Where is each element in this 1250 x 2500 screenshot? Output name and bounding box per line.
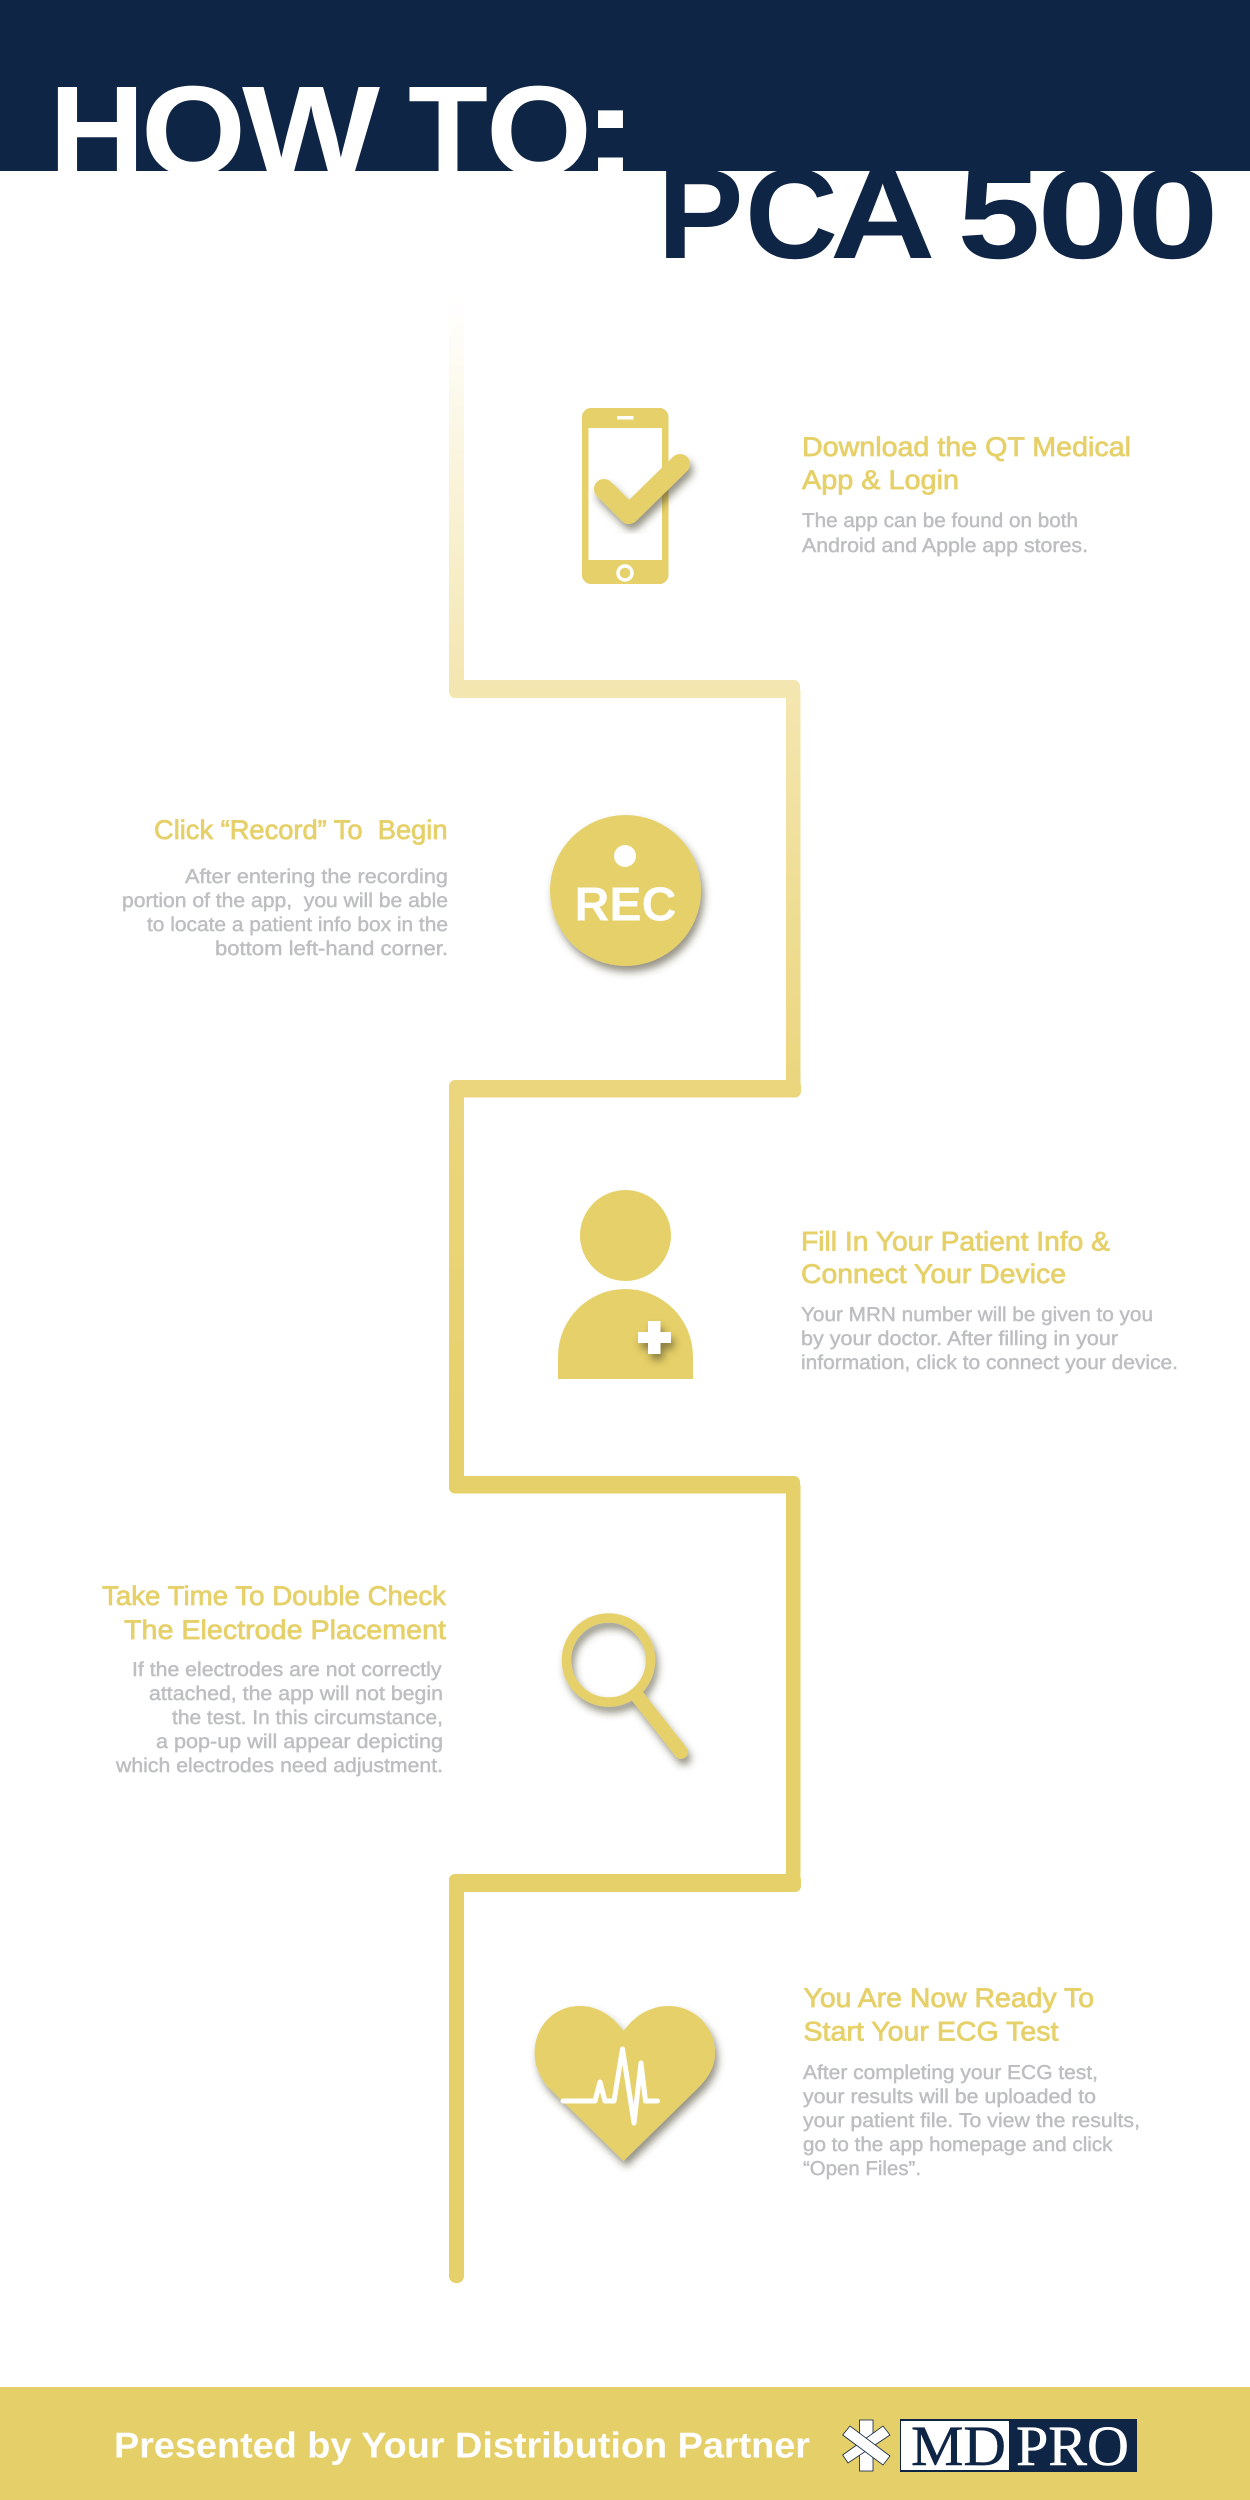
panel: step 4 electrode check [102,1581,681,1777]
heading: step 1 [802,432,1131,495]
title: PCA 500: 0 [1037,143,1129,286]
heading: step 3 [801,1226,1110,1289]
text: step 4 body: the test. In this circumstance, [172,1707,443,1729]
text: step 4 body: which electrodes need adjustment. [115,1755,443,1777]
heading: step 4: The Electrode Placement [124,1615,447,1645]
text: step 5 body: your patient file. To view the results, [803,2110,1140,2132]
title: HOW TO: O [486,60,592,203]
text: step 4 body: attached, the app will not begin [149,1683,443,1705]
text: step 2 body: After entering the recording [185,866,448,888]
logo wordmark [900,2415,1137,2478]
title: HOW TO: H [49,60,145,203]
title: HOW TO: O [141,60,246,203]
text: step 1 body: Android and Apple app stores. [802,535,1088,557]
panel: step 1 download [582,408,1131,584]
logo: MDPRO [843,2415,1137,2478]
text: step 4 body [115,1659,443,1777]
heading: step 1: App & Login [802,465,959,495]
title: PCA 500: 5 [958,143,1040,286]
heading: step 5: Start Your ECG Test [804,2016,1059,2046]
text: step 5 body [803,2062,1140,2180]
footer text: Presented by Your Distribution Partner [114,2424,810,2466]
heading: step 2: Click “Record” To Begin [154,815,448,845]
text: step 5 body: your results will be uploaded to [803,2086,1096,2108]
icon: patient with medical cross [558,1190,693,1379]
text: step 1 body: The app can be found on both [802,510,1078,532]
heading: step 4: Take Time To Double Check [102,1581,447,1611]
logo wordmark: MD [911,2415,1006,2478]
icon: phone with check mark [582,408,680,584]
title: PCA 500: C [745,143,838,286]
title: PCA 500: 0 [1127,143,1219,286]
heading: step 5 [804,1983,1094,2046]
text: step 5 body: “Open Files”. [803,2158,921,2180]
connector line: zig-zag timeline [449,300,801,2283]
panel: step 5 ECG test [535,1983,1140,2180]
heading: step 5: You Are Now Ready To [804,1983,1094,2013]
footer band [0,2387,1250,2500]
logo wordmark: PRO [1016,2415,1129,2478]
icon: logo star [843,2420,890,2471]
heading: step 4 [102,1581,447,1645]
header band [0,0,1250,171]
heading: step 1: Download the QT Medical [802,432,1131,462]
text: step 3 body: Your MRN number will be given to you [801,1304,1153,1326]
text: step 2 body: bottom left-hand corner. [215,938,448,960]
title: HOW TO: W [242,60,380,203]
text: step 5 body: After completing your ECG test, [803,2062,1098,2084]
text: step 4 body: If the electrodes are not correctly [132,1659,442,1681]
icon: heart with ECG trace [535,2006,715,2161]
panel: step 2 record [122,815,701,966]
title: HOW TO: T [408,60,488,203]
text: step 5 body: go to the app homepage and click [803,2134,1114,2156]
text: step 1 body [802,510,1088,557]
title: HOW TO: : [581,60,640,203]
icon: REC button [550,815,701,966]
heading: step 3: Connect Your Device [801,1259,1066,1289]
text: step 2 body [122,866,448,960]
text: step 3 body: information, click to connect your device. [801,1352,1178,1374]
text: step 2 body: to locate a patient info box in the [147,914,448,936]
panel: step 3 patient info [558,1190,1178,1379]
text: step 4 body: a pop-up will appear depicting [156,1731,443,1753]
title: PCA 500: A [830,143,933,286]
icon: REC button: REC [574,878,676,932]
heading: step 3: Fill In Your Patient Info & [801,1226,1110,1256]
text: step 2 body: portion of the app, you will be able [122,890,448,912]
title: PCA 500: P [658,143,744,286]
icon: magnifying glass [566,1618,681,1752]
text: step 3 body: by your doctor. After filling in your [801,1328,1118,1350]
text: step 3 body [801,1304,1178,1374]
